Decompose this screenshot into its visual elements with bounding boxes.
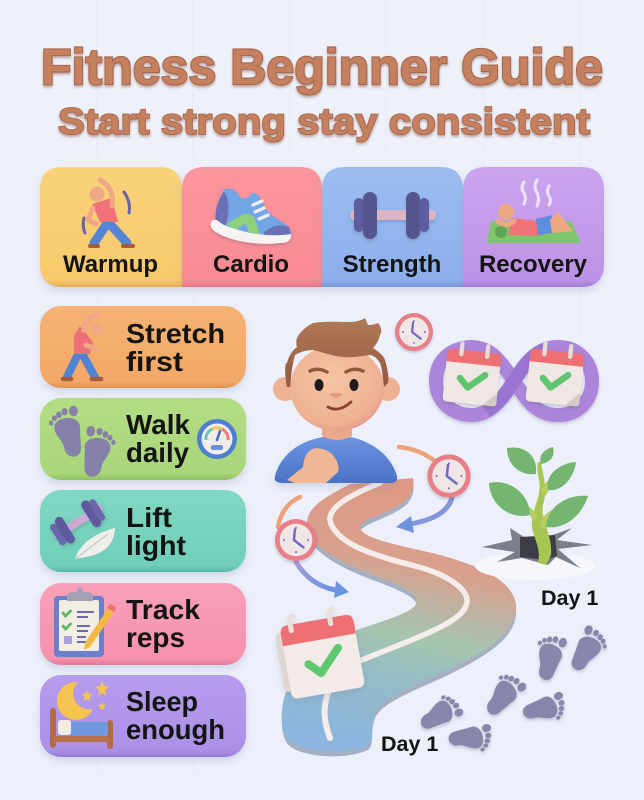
ground crack bbox=[482, 528, 592, 568]
text: lift light: Lift bbox=[126, 502, 172, 533]
leaves bbox=[507, 448, 536, 474]
icon: speed gauge bbox=[197, 419, 237, 459]
label: day 1 upper: Day 1 bbox=[541, 586, 598, 610]
text: track reps: Track bbox=[126, 594, 200, 625]
label: warmup: Warmup bbox=[63, 251, 158, 278]
icon: small clock top bbox=[395, 313, 433, 351]
icon: clipboard and pencil bbox=[54, 588, 116, 657]
icon: small dumbbell and feather bbox=[46, 494, 115, 559]
ears bbox=[273, 377, 297, 401]
neck bbox=[322, 425, 352, 440]
stem bbox=[532, 462, 551, 565]
icon: sprouting plant in crack bbox=[475, 447, 595, 580]
text: walk daily: Walk bbox=[126, 409, 190, 440]
habit loop: infinity with calendars bbox=[436, 342, 592, 415]
panel: sleep enough bbox=[40, 675, 246, 757]
ground patch bbox=[475, 552, 595, 580]
card: cardio bbox=[182, 167, 322, 287]
text: stretch first: first bbox=[126, 346, 183, 377]
text: sleep enough: enough bbox=[126, 714, 225, 745]
text: walk daily bbox=[126, 409, 190, 468]
card: recovery bbox=[463, 167, 604, 287]
title: Fitness Beginner Guide bbox=[41, 39, 603, 95]
shirt bbox=[275, 437, 397, 483]
card: strength bbox=[322, 167, 463, 287]
icon: clock with arrow right bbox=[396, 447, 471, 533]
label: strength: Strength bbox=[343, 251, 441, 278]
icon: clock with arrow left bbox=[275, 497, 349, 598]
icon: person resting on mat bbox=[487, 180, 581, 243]
icon: footprints trail bbox=[414, 624, 612, 757]
eyes and mouth bbox=[310, 369, 363, 409]
calendar left bbox=[442, 342, 502, 407]
text: track reps: reps bbox=[126, 622, 185, 653]
text: walk daily: daily bbox=[126, 437, 189, 468]
hair bbox=[285, 318, 388, 387]
icon: feet bbox=[47, 405, 117, 479]
face bbox=[290, 345, 384, 431]
panel: category cards bbox=[40, 167, 604, 287]
character bbox=[273, 318, 400, 483]
loop crossing band bbox=[486, 350, 544, 411]
panel: lift light bbox=[40, 490, 246, 572]
winding road bbox=[282, 478, 516, 756]
icon: stretching figure bbox=[63, 315, 104, 379]
text: stretch first: Stretch bbox=[126, 318, 225, 349]
road centre line bbox=[330, 483, 467, 660]
icon: moon stars and bed bbox=[50, 681, 113, 749]
text: sleep enough bbox=[126, 686, 225, 745]
label: recovery: Recovery bbox=[479, 251, 588, 278]
text: lift light bbox=[126, 502, 186, 561]
panel: walk daily bbox=[40, 398, 246, 480]
label: cardio: Cardio bbox=[213, 251, 289, 278]
text: stretch first bbox=[126, 318, 225, 377]
subtitle: Start strong stay consistent bbox=[58, 101, 590, 142]
icon: warmup figure bbox=[83, 180, 133, 246]
text: track reps bbox=[126, 594, 200, 653]
icon: big calendar check bbox=[272, 606, 365, 701]
text: sleep enough: Sleep bbox=[126, 686, 198, 717]
fist bbox=[287, 448, 339, 483]
panel: stretch first bbox=[40, 306, 246, 388]
text: lift light: light bbox=[126, 530, 186, 561]
panel: track reps bbox=[40, 583, 246, 665]
label: day 1 lower: Day 1 bbox=[381, 732, 438, 756]
icon: shoe bbox=[211, 188, 292, 244]
calendar right bbox=[525, 342, 585, 407]
card: warmup bbox=[40, 167, 182, 287]
icon: dumbbell bbox=[350, 192, 436, 239]
